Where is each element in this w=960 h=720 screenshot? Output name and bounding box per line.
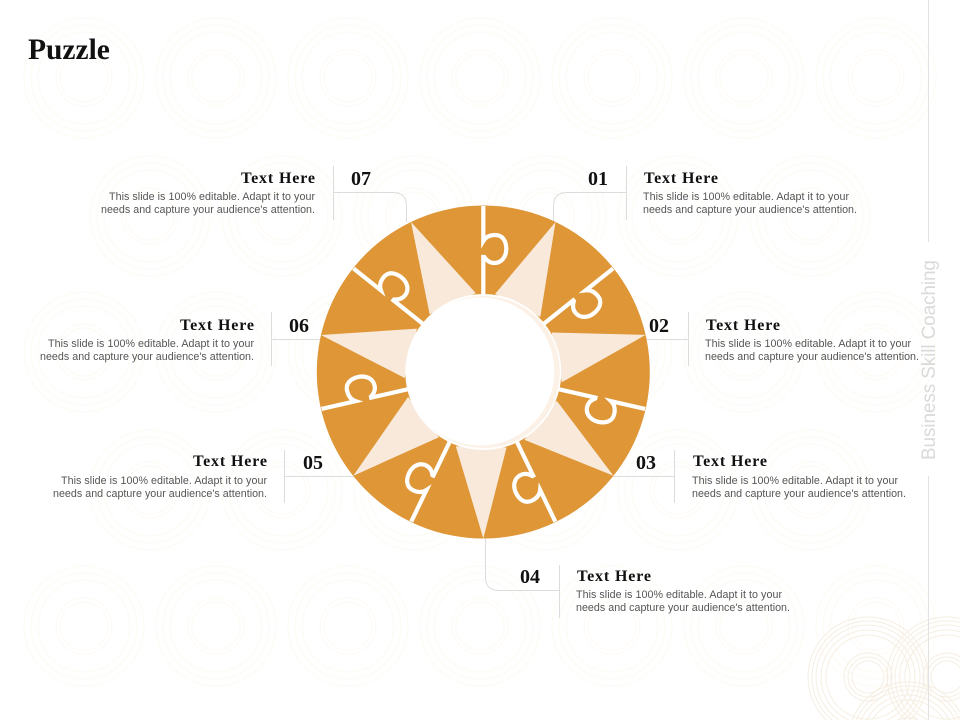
callout 01: This slide is 100% editable. Adapt it to your — [643, 191, 849, 203]
callout 03 — [613, 450, 906, 503]
callout 05: 05 — [303, 452, 323, 474]
callout 04: Text Here — [577, 568, 651, 585]
callout 01: Text Here — [644, 170, 718, 187]
centre hole — [405, 294, 561, 450]
callout 04: This slide is 100% editable. Adapt it to your — [576, 589, 782, 601]
callout 07: This slide is 100% editable. Adapt it to your — [109, 191, 315, 203]
callout 01: 01 — [588, 168, 608, 190]
callout 02: 02 — [649, 315, 669, 337]
callout 02: needs and capture your audience's attention. — [705, 351, 919, 363]
callout 02: Text Here — [706, 317, 780, 334]
callout 07 — [101, 166, 406, 222]
callout 03: Text Here — [693, 453, 767, 470]
callout 05 — [53, 450, 357, 503]
callout 05: This slide is 100% editable. Adapt it to your — [61, 475, 267, 487]
callout 02 — [645, 312, 919, 366]
callout 04 — [486, 538, 790, 618]
callout 01 — [554, 166, 857, 222]
callout 03: 03 — [636, 452, 656, 474]
callout 07: Text Here — [241, 170, 315, 187]
title: Puzzle — [28, 34, 110, 66]
callout 06 — [40, 312, 321, 366]
callout 04: 04 — [520, 566, 540, 588]
callout 03: needs and capture your audience's attention. — [692, 488, 906, 500]
callout 06: This slide is 100% editable. Adapt it to your — [48, 338, 254, 350]
callout 06: Text Here — [180, 317, 254, 334]
light star points — [321, 222, 646, 538]
callout 02: This slide is 100% editable. Adapt it to your — [705, 338, 911, 350]
centre disc — [406, 298, 554, 446]
puzzle seams — [316, 206, 645, 532]
callout 06: 06 — [289, 315, 309, 337]
callout 05: Text Here — [193, 453, 267, 470]
callout 04: needs and capture your audience's attention. — [576, 602, 790, 614]
puzzle wheel — [316, 206, 650, 538]
sidebar label: Business Skill Coaching — [919, 260, 940, 460]
callout 07: needs and capture your audience's attention. — [101, 204, 315, 216]
wheel disc — [317, 206, 650, 538]
callout 07: 07 — [351, 168, 371, 190]
callout 03: This slide is 100% editable. Adapt it to your — [692, 475, 898, 487]
callout 01: needs and capture your audience's attention. — [643, 204, 857, 216]
callout 06: needs and capture your audience's attention. — [40, 351, 254, 363]
callout 05: needs and capture your audience's attention. — [53, 488, 267, 500]
centre ring — [408, 296, 560, 448]
